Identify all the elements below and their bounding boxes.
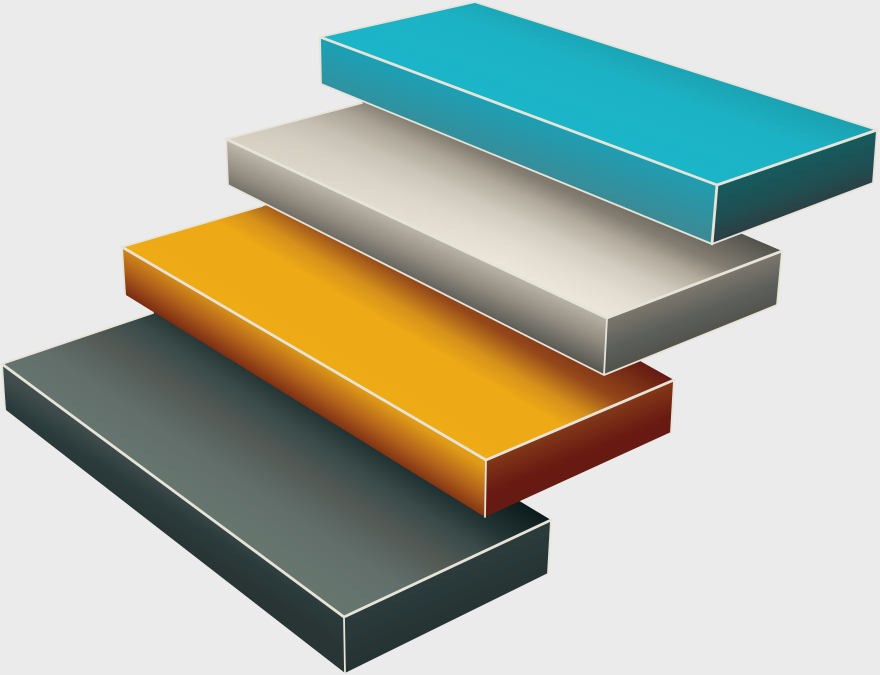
orange slab right face bbox=[485, 380, 674, 517]
dark slab top face bbox=[2, 301, 551, 617]
teal slab top face bbox=[320, 2, 877, 185]
beige slab right face bbox=[604, 251, 782, 375]
slab: dark grey bbox=[2, 301, 551, 673]
orange slab top face bbox=[122, 187, 674, 460]
beige slab left face bbox=[226, 139, 607, 375]
slab: teal bbox=[320, 2, 877, 244]
dark slab left face bbox=[2, 364, 345, 673]
dark slab right face bbox=[344, 520, 551, 673]
slab: orange bbox=[122, 187, 674, 517]
teal slab left face bbox=[320, 37, 717, 244]
slab: beige bbox=[226, 90, 782, 375]
beige slab top face bbox=[226, 90, 782, 318]
orange slab left face bbox=[122, 247, 486, 517]
teal slab right face bbox=[712, 130, 877, 244]
